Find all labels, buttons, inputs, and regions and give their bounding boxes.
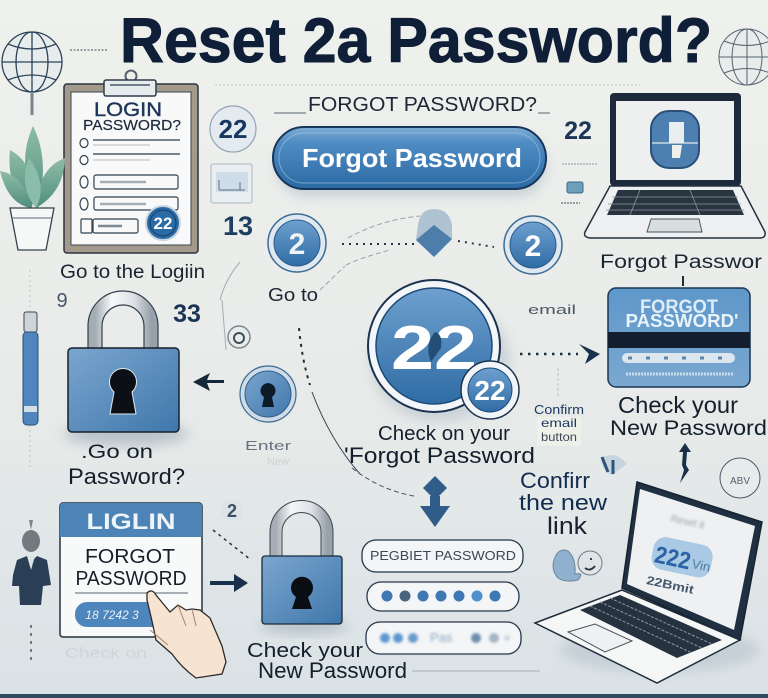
panel: forgot password card: [608, 288, 750, 387]
step circle right: 2: [525, 230, 541, 263]
label check your new password lower: New Password: [258, 658, 407, 683]
clipboard subheading: PASSWORD?: [83, 117, 181, 134]
card header: LIGLIN: [86, 509, 176, 534]
label 33: 33: [173, 300, 201, 328]
small badge: 22: [474, 375, 506, 406]
label check your new password lower: [247, 640, 407, 683]
icon: potted plant: [0, 126, 65, 250]
label go on password: [68, 442, 185, 489]
icon: globe left: [2, 32, 62, 115]
label check your new password: New Password: [610, 417, 767, 440]
label confirm email button: [534, 402, 584, 446]
label check your new password: [610, 392, 767, 440]
forgot password button: [273, 127, 546, 196]
clipboard badge: 22: [154, 214, 172, 233]
step circle left: 2: [289, 228, 305, 261]
label confirm email button: email: [541, 416, 577, 430]
label check on your forgot password: 'Forgot Password: [344, 443, 535, 468]
padlock small: [260, 500, 348, 634]
step circle right: [504, 216, 562, 274]
bottom band: [0, 694, 768, 698]
input pill dots: [367, 582, 519, 611]
icon: pen: [23, 312, 38, 425]
clipboard badge: [146, 206, 180, 240]
card header: [60, 503, 202, 537]
label confirm email button: Confirm: [534, 402, 584, 417]
forgot password button: Forgot Password: [302, 143, 522, 173]
step circle left: [268, 214, 326, 272]
laptop screen content: Vin: [690, 556, 712, 575]
icon: screen lock: [651, 111, 699, 168]
connector curve: [299, 328, 310, 385]
icon: circle stamp: ABV: [730, 476, 750, 487]
label confirm email button: button: [541, 430, 577, 444]
card text forgot: FORGOT: [85, 546, 175, 568]
arrow up: [679, 443, 691, 483]
laptop top right: [585, 93, 765, 238]
label enter new: [245, 438, 292, 468]
laptop screen content: 222: [652, 541, 693, 575]
panel: login card: [60, 503, 202, 637]
input pill new password: Pas: [430, 630, 453, 645]
icon: globe right: [719, 29, 768, 85]
card subheading: PASSWORD': [626, 311, 738, 331]
icon: nine glyph: 9: [56, 290, 68, 312]
icon: small face blob: [553, 550, 602, 581]
keyhole button: [240, 366, 296, 422]
connector dotted: [320, 216, 494, 290]
heading forgot password: FORGOT PASSWORD?: [308, 94, 537, 116]
label enter new: New: [267, 456, 289, 468]
icon: pointing hand: [147, 591, 226, 678]
laptop screen content: [645, 511, 720, 599]
clipboard clip: [104, 70, 156, 96]
label check on your forgot password: [344, 423, 535, 468]
number badge 22: [210, 106, 256, 152]
number badge 22: 22: [219, 114, 247, 144]
icon: small ring: [228, 326, 250, 348]
arrow to card: [520, 344, 600, 364]
icon: small two badge: [221, 499, 243, 521]
label confirm the new link: [519, 468, 607, 540]
input pill reset password: PEGBIET PASSWORD: [370, 548, 516, 563]
clipboard heading: LOGIN: [94, 100, 162, 121]
arrow right: [210, 574, 248, 592]
panel: login clipboard: [64, 70, 198, 253]
label confirm the new link: link: [547, 513, 588, 540]
icon: small tile: [561, 182, 583, 203]
small arrow to laptop label: [682, 276, 684, 286]
label check on: Check on: [65, 645, 147, 662]
laptop screen content: 22Bmit: [645, 573, 695, 597]
padlock large: [64, 291, 188, 446]
big step badge: 22: [391, 314, 477, 383]
label go on password: .Go on: [81, 442, 153, 463]
number label 22: 22: [564, 117, 592, 145]
label check your new password: Check your: [618, 392, 738, 418]
big step badge: [368, 280, 519, 422]
card pill: 18 7242 3: [85, 608, 139, 622]
laptop bottom right: [535, 482, 762, 683]
icon: small blob: [601, 455, 627, 475]
label confirm the new link: the new: [519, 490, 607, 515]
card pill: [75, 602, 167, 627]
icon: small two badge: 2: [227, 501, 237, 521]
small badge: [461, 361, 519, 419]
arrow down: [420, 476, 450, 527]
label forgot passwor: Forgot Passwor: [600, 252, 763, 273]
icon: center shield: [416, 209, 452, 257]
label 13: 13: [223, 211, 253, 241]
label confirm the new link: Confirr: [520, 468, 590, 493]
icon: person: [12, 520, 51, 605]
card text password: PASSWORD: [76, 568, 186, 590]
input pill new password: [366, 622, 521, 654]
title: Reset 2a Password?: [120, 6, 712, 76]
label email: email: [528, 302, 576, 317]
label go to: Go to: [268, 285, 318, 305]
label check on your forgot password: Check on your: [378, 423, 510, 445]
arrow left: [193, 373, 224, 391]
label enter new: Enter: [245, 438, 292, 453]
icon: small widget: [211, 164, 252, 203]
label go to login: Go to the Logiin: [60, 262, 205, 283]
icon: circle stamp: [720, 458, 760, 498]
label go on password: Password?: [68, 464, 185, 489]
card heading: FORGOT: [640, 297, 718, 318]
label check your new password lower: Check your: [247, 640, 363, 662]
input pill reset password: [362, 540, 523, 572]
clipboard form rows: [80, 138, 180, 233]
laptop screen content: Reset it: [670, 514, 705, 532]
